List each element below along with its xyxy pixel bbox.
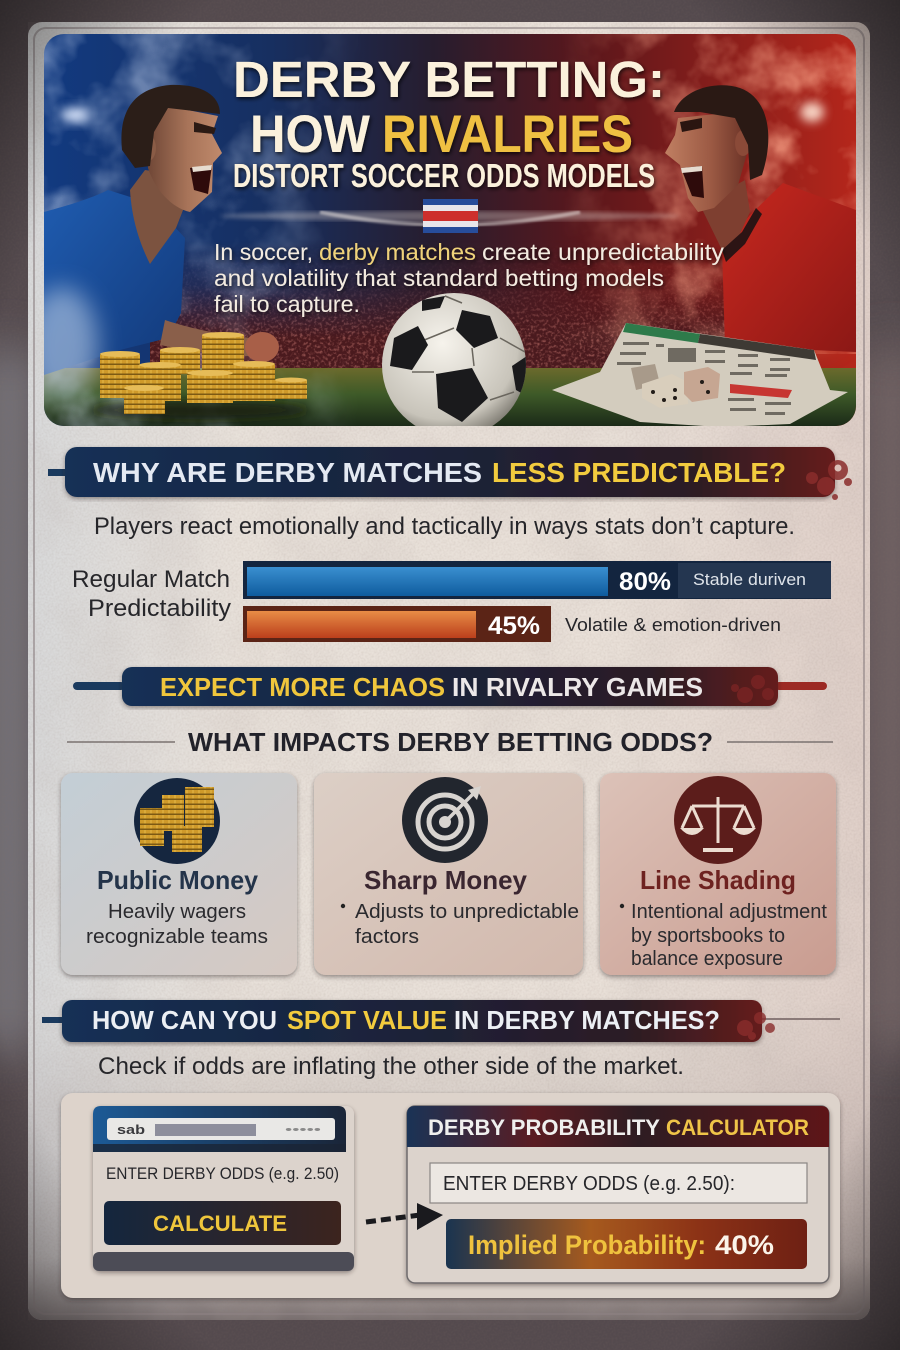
banner: expect more chaos: EXPECT MORE CHAOS (160, 672, 445, 702)
derby probability calculator (407, 1106, 829, 1283)
panel: public money (61, 773, 297, 975)
title (233, 51, 665, 194)
heading: what impacts derby betting odds: WHAT IMPACTS DERBY BETTING ODDS? (188, 727, 713, 757)
bar chart: predictability (72, 561, 831, 642)
blue smoke over shirt (26, 287, 98, 403)
bar: regular match 80%: Stable duriven (693, 571, 806, 589)
banner: how can you spot value: SPOT VALUE (287, 1005, 447, 1035)
right player (665, 85, 856, 352)
panel: line shading: Intentional adjustment (631, 901, 827, 923)
derby probability calculator: Implied Probability: (468, 1230, 706, 1260)
panel: sharp money: Adjusts to unpredictable (355, 901, 579, 923)
banner: how can you spot value: HOW CAN YOU (92, 1005, 277, 1035)
calculator input widget: CALCULATE (153, 1211, 287, 1236)
intro text: derby matches (319, 239, 476, 265)
icon: gold coin stacks (90, 332, 310, 419)
banner: why are derby matches less predictable: WHY ARE DERBY MATCHES (93, 457, 482, 488)
chart label (72, 566, 231, 622)
banner: expect more chaos: IN RIVALRY GAMES (452, 672, 703, 702)
title: RIVALRIES (382, 105, 633, 164)
derby probability calculator: ENTER DERBY ODDS (e.g. 2.50): (443, 1173, 735, 1195)
calculator input widget: sab (117, 1122, 145, 1137)
bar: derby match 45%: 45% (488, 612, 540, 640)
derby probability calculator: CALCULATOR (666, 1115, 809, 1140)
hero panel (26, 34, 856, 437)
panel: calculator area (61, 1093, 840, 1298)
subheading: players react: Players react emotionally and tactically in ways stats don’t capture. (94, 513, 795, 540)
stadium crowd (150, 254, 725, 368)
panel: public money: recognizable teams (86, 926, 268, 948)
title: HOW (250, 105, 370, 164)
chart label: Predictability (88, 595, 231, 622)
banner: expect more chaos (73, 667, 827, 706)
calculator input widget (93, 1106, 354, 1271)
panel: line shading: balance exposure (631, 948, 783, 970)
panel: line shading: Line Shading (640, 865, 796, 895)
pitch (44, 368, 856, 426)
panel: sharp money (314, 773, 583, 975)
panel: line shading: by sportsbooks to (631, 925, 785, 947)
icon: target (402, 777, 488, 863)
panel: sharp money: factors (355, 926, 419, 948)
newspaper and dice (552, 323, 848, 427)
banner: how can you spot value: IN DERBY MATCHES? (454, 1005, 720, 1035)
bar: derby match 45%: Volatile & emotion-driven (565, 615, 781, 635)
icon: coins (134, 778, 220, 864)
stadium lights and flag (220, 199, 680, 233)
panel: line shading (600, 773, 836, 975)
banner: why are derby matches less predictable: LESS PREDICTABLE? (492, 457, 786, 488)
bar: regular match 80% (243, 561, 831, 599)
title: DERBY BETTING: (233, 51, 665, 108)
panel: public money: Heavily wagers (108, 901, 246, 923)
chart label: Regular Match (72, 566, 230, 593)
left player (44, 85, 279, 375)
icon: soccer ball (382, 293, 526, 426)
bar: derby match 45% (243, 606, 781, 642)
intro text: create unpredictability (482, 239, 725, 265)
calculator input widget: ENTER DERBY ODDS (e.g. 2.50) (106, 1164, 339, 1183)
banner: why are derby matches less predictable (48, 447, 852, 500)
intro text: In soccer, (214, 239, 313, 265)
calculator input widget: ••••• (285, 1124, 321, 1136)
title: DISTORT SOCCER ODDS MODELS (233, 157, 655, 194)
intro text: and volatility that standard betting models (214, 265, 664, 291)
derby probability calculator: 40% (715, 1230, 774, 1260)
bar: regular match 80%: 80% (619, 568, 671, 596)
arrow (366, 1203, 443, 1230)
icon: balance scale (674, 776, 762, 864)
derby probability calculator: DERBY PROBABILITY (428, 1115, 660, 1140)
banner: how can you spot value (42, 1000, 840, 1042)
panel: sharp money: Sharp Money (364, 865, 528, 895)
subheading: check if odds: Check if odds are inflating the other side of the market. (98, 1053, 684, 1080)
intro text: fail to capture. (214, 291, 360, 317)
blue and red smoke (44, 34, 856, 426)
intro text (214, 239, 725, 317)
panel: public money: Public Money (97, 865, 259, 895)
